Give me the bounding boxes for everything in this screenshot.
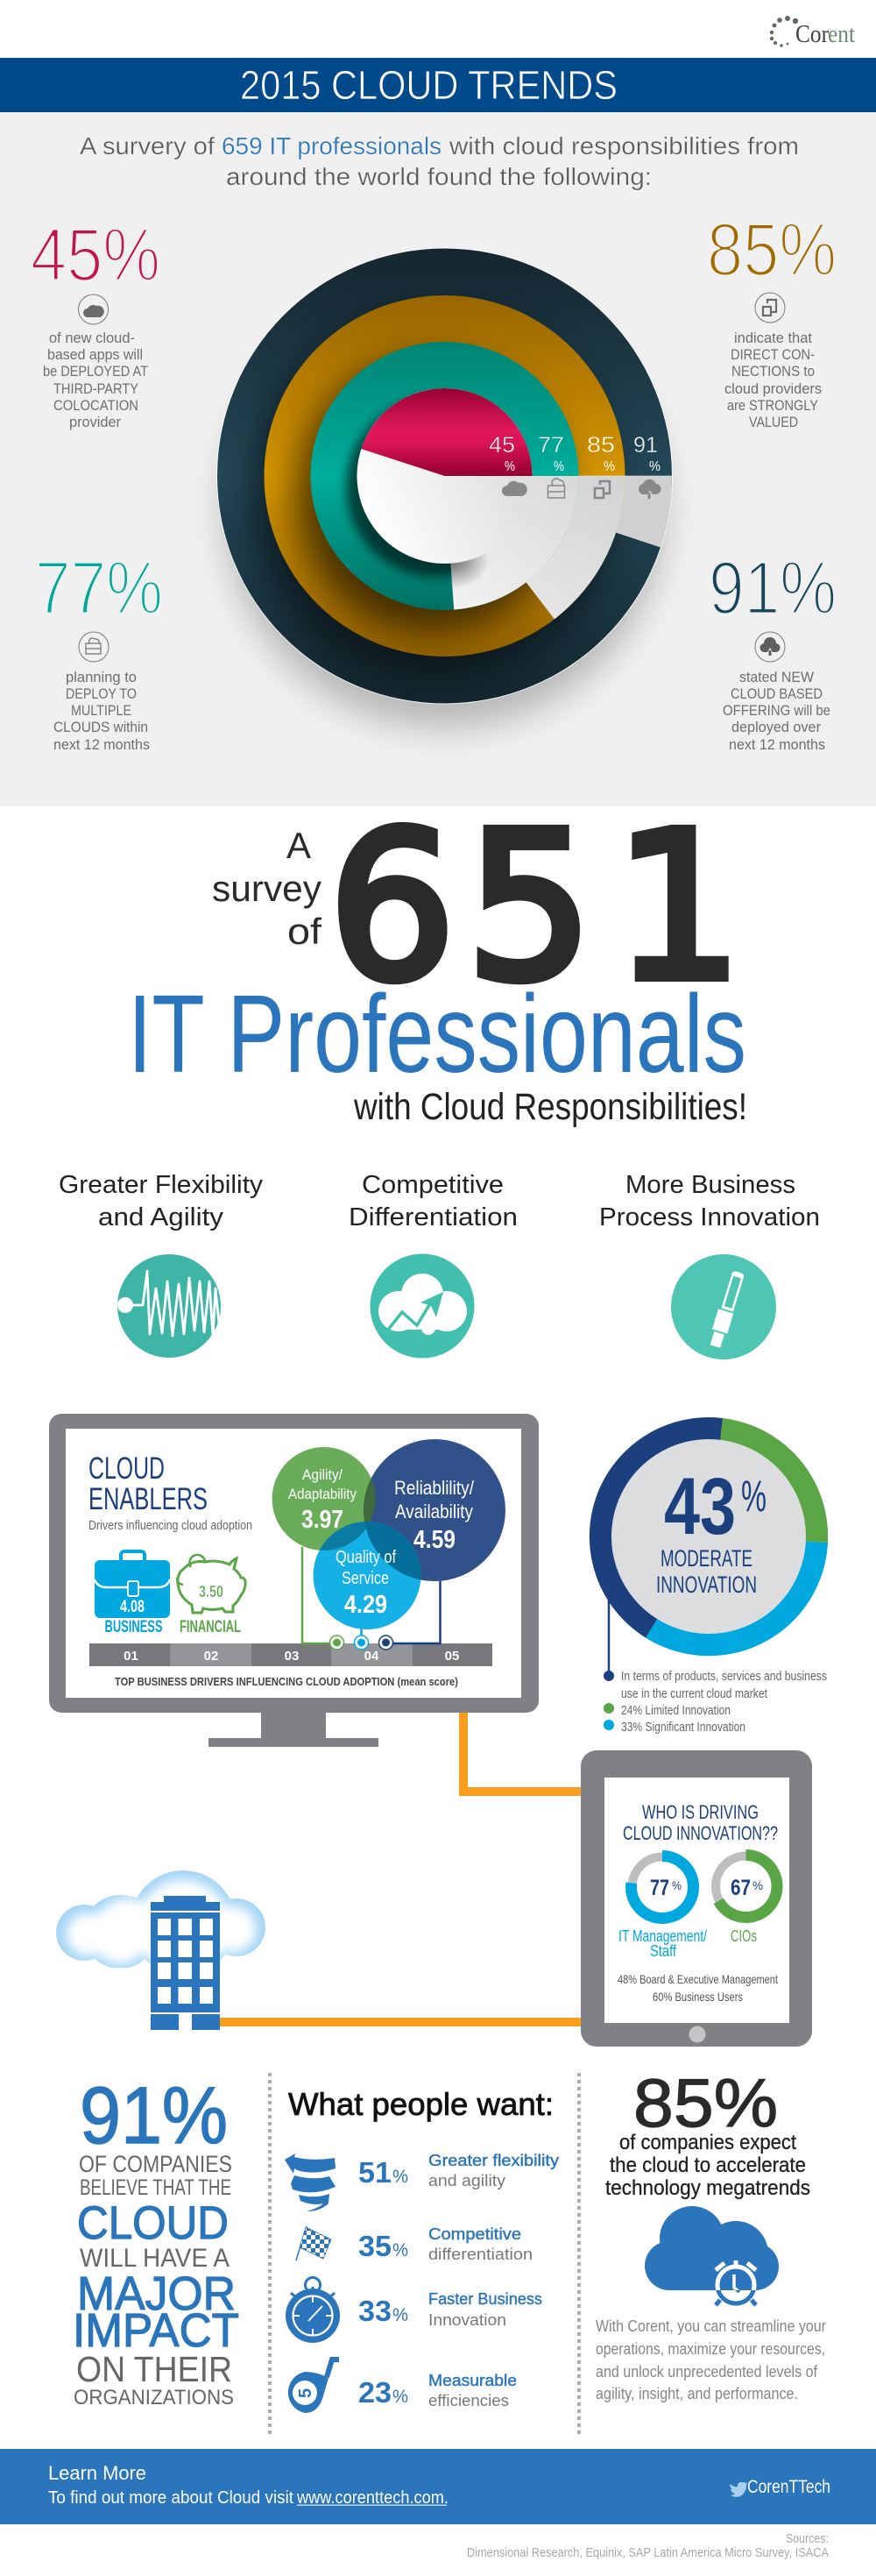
stat: 91%: 91% <box>709 547 837 630</box>
footer band: learn more: Learn More <box>48 2462 146 2484</box>
stat: 85%: 85% <box>707 209 837 292</box>
chart icons <box>502 479 661 499</box>
panel: 91% of companies: ORGANIZATIONS <box>74 2386 234 2409</box>
panel: 91% of companies <box>73 2071 239 2409</box>
headline: a survey of 651: of <box>287 911 321 952</box>
stat: 45%: 45% <box>31 214 160 297</box>
monitor panel: cloud enablers <box>49 1414 539 1747</box>
bubble labels <box>288 1466 475 1619</box>
icon: cloud with arrow <box>370 1253 475 1359</box>
stat: 45%: COLOCATION <box>53 397 138 414</box>
item: faster business innovation 33%: % <box>392 2305 408 2325</box>
stat: 85%: are STRONGLY <box>727 397 818 414</box>
item: greater flexibility 51%: 51 <box>358 2156 392 2189</box>
intro text <box>80 132 799 190</box>
stat: 45% <box>31 214 160 430</box>
item: competitive differentiation 35%: differentiation <box>428 2246 533 2263</box>
bubble: reliability <box>364 1439 505 1581</box>
connector: monitor to tablet <box>463 1709 583 1792</box>
stat: 91%: OFFERING will be <box>723 702 830 719</box>
benefit: greater flexibility: and Agility <box>98 1203 224 1231</box>
chart value labels <box>489 433 661 474</box>
item: measurable efficiencies 23%: efficiencies <box>428 2392 509 2409</box>
ring: 77% IT management: 77 <box>650 1876 669 1900</box>
item: measurable efficiencies 23% <box>288 2360 517 2413</box>
panel: 91% of companies: CLOUD <box>77 2197 229 2249</box>
logo: Corent: ent <box>828 20 855 48</box>
intro text: with cloud responsibilities from <box>449 132 799 160</box>
bar caption: TOP BUSINESS DRIVERS INFLUENCING CLOUD ADOPTION (mean score) <box>115 1675 458 1688</box>
sources: Sources: <box>786 2531 829 2546</box>
stat: 45%: THIRD-PARTY <box>53 380 138 397</box>
stat: 77%: CLOUDS within <box>53 719 148 735</box>
stat: 85%: indicate that <box>734 330 812 346</box>
icon: briefcase business score <box>95 1551 170 1636</box>
bubble: overlap agility reliability <box>364 1478 376 1522</box>
stat: 77%: 77% <box>35 547 163 630</box>
heading: cloud enablers: Drivers influencing cloud adoption <box>88 1518 252 1533</box>
ring: 67% CIOs: CIOs <box>731 1927 757 1945</box>
heading: cloud enablers: CLOUD <box>88 1451 165 1486</box>
panel: 85% of companies: operations, maximize your resources, <box>596 2340 825 2358</box>
item: faster business innovation 33%: Innovation <box>428 2311 506 2329</box>
ring: 67% CIOs: % <box>752 1878 763 1892</box>
item: measurable efficiencies 23%: 5 <box>296 2388 315 2398</box>
icon: cloud drive <box>79 632 109 662</box>
item: competitive differentiation 35%: % <box>392 2240 408 2260</box>
stat: 77% <box>35 547 163 753</box>
icon: linked squares <box>755 293 785 323</box>
icon: piggy bank financial score: 3.50 <box>199 1583 223 1600</box>
panel: 85% of companies: and unlock unprecedented levels of <box>596 2363 818 2381</box>
intro text: 659 IT professionals <box>222 132 442 160</box>
bubble labels: 4.59 <box>413 1526 456 1554</box>
stat: 91%: stated NEW <box>739 669 814 685</box>
chart value labels: % <box>604 459 615 474</box>
connector: building to tablet <box>219 2018 583 2026</box>
donut legend: 33% Significant Innovation <box>621 1721 745 1735</box>
stat: 85%: VALUED <box>749 414 798 430</box>
benefit: competitive differentiation: Differentiation <box>349 1203 518 1231</box>
ring: 67% CIOs: 67 <box>731 1876 751 1900</box>
stat: 77%: planning to <box>66 669 137 685</box>
panel: what people want <box>285 2086 559 2413</box>
panel: 85% of companies: the cloud to accelerate <box>610 2154 806 2177</box>
panel: 85% of companies: agility, insight, and performance. <box>596 2385 798 2402</box>
stat: 91% <box>709 547 837 753</box>
headline: a survey of 651: 6 <box>328 789 456 1025</box>
stat: 77%: DEPLOY TO <box>66 685 137 702</box>
icon: briefcase business score: BUSINESS <box>105 1618 163 1636</box>
bar: scale 01 to 05: 04 <box>364 1649 379 1664</box>
benefit: more business process innovation: More Business <box>625 1171 795 1199</box>
benefit: more business process innovation <box>599 1171 820 1359</box>
benefit: more business process innovation: Process Innovation <box>599 1203 820 1231</box>
headline: a survey of 651 <box>212 789 743 1025</box>
stat: 91%: deployed over <box>731 719 821 735</box>
panel: 91% of companies: ON THEIR <box>76 2349 232 2389</box>
donut chart: 43% moderate innovation <box>590 1417 828 1656</box>
stat: 45%: be DEPLOYED AT <box>43 363 148 380</box>
donut chart: 43% moderate innovation: 43 <box>664 1462 736 1551</box>
bubble labels: Reliablility/ <box>394 1477 475 1499</box>
ring: 77% IT management: Staff <box>650 1942 677 1960</box>
item: competitive differentiation 35% <box>296 2225 533 2263</box>
donut chart: 43% moderate innovation: INNOVATION <box>656 1572 757 1598</box>
icon: cloud upload <box>755 632 785 662</box>
ring: 77% IT management: IT Management/ <box>618 1927 707 1945</box>
stat: 77%: next 12 months <box>53 736 150 753</box>
panel: 85% of companies <box>596 2064 826 2402</box>
bubble: overlap with quality <box>319 1522 420 1579</box>
logo: Corent: Cor <box>795 20 829 48</box>
benefit: competitive differentiation <box>349 1171 518 1359</box>
stat: 45%: provider <box>69 414 121 430</box>
item: greater flexibility 51%: % <box>392 2167 408 2187</box>
title banner <box>0 58 876 112</box>
chart value labels: % <box>505 459 515 474</box>
panel: 85% of companies: of companies expect <box>619 2131 796 2154</box>
bar: scale 01 to 05: 02 <box>204 1649 218 1664</box>
panel: 91% of companies: MAJOR <box>77 2267 236 2320</box>
ring: 77% IT management: % <box>672 1878 682 1892</box>
chart value labels: % <box>554 459 564 474</box>
title banner: 2015 CLOUD TRENDS <box>240 62 618 108</box>
heading: cloud enablers <box>88 1451 252 1533</box>
headline: a survey of 651: survey <box>212 868 321 909</box>
panel: 91% of companies: WILL HAVE A <box>80 2244 230 2273</box>
headline: a survey of 651: 5 <box>466 789 593 1025</box>
bubble labels: Agility/ <box>302 1466 343 1483</box>
intro text: A survery of <box>80 132 215 160</box>
bar: scale 01 to 05 <box>89 1643 492 1666</box>
item: competitive differentiation 35%: 35 <box>358 2230 392 2262</box>
tablet panel: who is driving cloud innovation: WHO IS DRIVING <box>642 1801 759 1823</box>
stat: 85%: DIRECT CON- <box>731 346 815 363</box>
footer band: learn more: CorenTTech <box>747 2477 830 2497</box>
icon: pulse waveform <box>117 1254 221 1358</box>
footer band: learn more: www.corenttech.com. <box>296 2488 449 2508</box>
donut legend: 24% Limited Innovation <box>621 1704 731 1718</box>
stat: 45%: based apps will <box>47 346 143 363</box>
tablet panel: who is driving cloud innovation: 60% Business Users <box>653 1990 743 2004</box>
icon: cloud with building <box>53 1867 272 2030</box>
panel: 85% of companies: With Corent, you can streamline your <box>596 2317 826 2335</box>
chart value labels: 77 <box>538 433 564 458</box>
item: greater flexibility 51%: Greater flexibility <box>428 2152 559 2169</box>
bubble labels: Adaptability <box>288 1486 357 1502</box>
stat: 91%: CLOUD BASED <box>731 685 823 702</box>
item: measurable efficiencies 23%: % <box>392 2387 408 2407</box>
icon: twitter bird <box>730 2482 747 2497</box>
item: measurable efficiencies 23%: 23 <box>358 2376 392 2409</box>
stat: 45%: of new cloud- <box>49 330 135 346</box>
icon: briefcase business score: 4.08 <box>120 1598 145 1616</box>
item: competitive differentiation 35%: Competitive <box>428 2225 521 2243</box>
chart: concentric ring chart <box>216 247 673 727</box>
stat: 85%: cloud providers <box>724 380 822 397</box>
benefit: greater flexibility: Greater Flexibility <box>59 1171 264 1199</box>
panel: 91% of companies: 91% <box>80 2071 228 2161</box>
chart value labels: 85 <box>587 433 615 458</box>
panel: 91% of companies: BELIEVE THAT THE <box>80 2175 231 2200</box>
bubble: agility <box>272 1447 376 1551</box>
item: measurable efficiencies 23%: Measurable <box>428 2372 517 2389</box>
icon: spyglass <box>671 1254 776 1359</box>
bar: scale 01 to 05: 03 <box>285 1649 299 1664</box>
item: faster business innovation 33% <box>286 2277 542 2343</box>
headline: a survey of 651: A <box>286 825 311 866</box>
tablet panel: who is driving cloud innovation <box>581 1750 812 2047</box>
bubble: quality of service <box>314 1522 420 1629</box>
icon: piggy bank financial score <box>177 1555 245 1636</box>
bubble labels: 3.97 <box>301 1506 343 1534</box>
donut legend <box>604 1599 827 1735</box>
donut legend: use in the current cloud market <box>621 1687 767 1701</box>
tablet panel: who is driving cloud innovation: 48% Board & Executive Management <box>618 1972 778 1986</box>
icon: cloud with alarm clock <box>645 2206 779 2305</box>
item: faster business innovation 33%: Faster Business <box>428 2290 542 2308</box>
panel: 85% of companies: 85% <box>633 2064 778 2141</box>
bubble labels: Service <box>342 1569 389 1588</box>
footer band: learn more <box>0 2449 876 2524</box>
headline: with cloud responsibilities: with Cloud Responsibilities! <box>353 1086 747 1128</box>
tablet panel: who is driving cloud innovation: CLOUD INNOVATION?? <box>623 1822 778 1844</box>
benefit: greater flexibility <box>59 1171 264 1358</box>
benefit: competitive differentiation: Competitive <box>362 1171 504 1199</box>
logo: Corent <box>770 16 855 48</box>
sources <box>467 2531 829 2560</box>
donut chart: 43% moderate innovation: MODERATE <box>661 1545 752 1572</box>
ring: 77% IT management <box>618 1856 707 1960</box>
stat: 85% <box>707 209 837 430</box>
ring: 67% CIOs <box>715 1855 777 1945</box>
chart value labels: % <box>649 459 661 474</box>
panel: what people want: What people want: <box>288 2086 554 2122</box>
panel: 91% of companies: IMPACT <box>73 2304 239 2357</box>
stat: 91%: next 12 months <box>729 736 825 753</box>
chart value labels: 91 <box>633 433 658 458</box>
connector markers <box>302 1547 440 1650</box>
stat: 77%: MULTIPLE <box>71 702 131 719</box>
bar: scale 01 to 05: 05 <box>445 1649 459 1664</box>
bar: scale 01 to 05: 01 <box>124 1649 138 1664</box>
stat: 85%: NECTIONS to <box>731 363 815 380</box>
icon: cloud signal <box>79 295 109 324</box>
panel: 91% of companies: OF COMPANIES <box>79 2151 232 2177</box>
chart value labels: 45 <box>489 433 515 458</box>
bubble labels: 4.29 <box>344 1591 387 1619</box>
heading: cloud enablers: ENABLERS <box>88 1482 208 1516</box>
donut legend: In terms of products, services and business <box>621 1670 827 1684</box>
panel: 85% of companies: technology megatrends <box>605 2176 810 2200</box>
item: greater flexibility 51% <box>285 2152 559 2211</box>
bubble labels: Availability <box>395 1501 473 1522</box>
icon: piggy bank financial score: FINANCIAL <box>180 1618 241 1636</box>
donut chart: 43% moderate innovation: % <box>741 1472 766 1521</box>
headline: a survey of 651: 1 <box>614 789 743 1025</box>
item: greater flexibility 51%: and agility <box>428 2172 505 2189</box>
bubble labels: Quality of <box>336 1548 396 1567</box>
footer band: learn more: To find out more about Cloud visit <box>48 2488 293 2508</box>
intro text: around the world found the following: <box>226 163 652 190</box>
item: faster business innovation 33%: 33 <box>358 2295 392 2327</box>
